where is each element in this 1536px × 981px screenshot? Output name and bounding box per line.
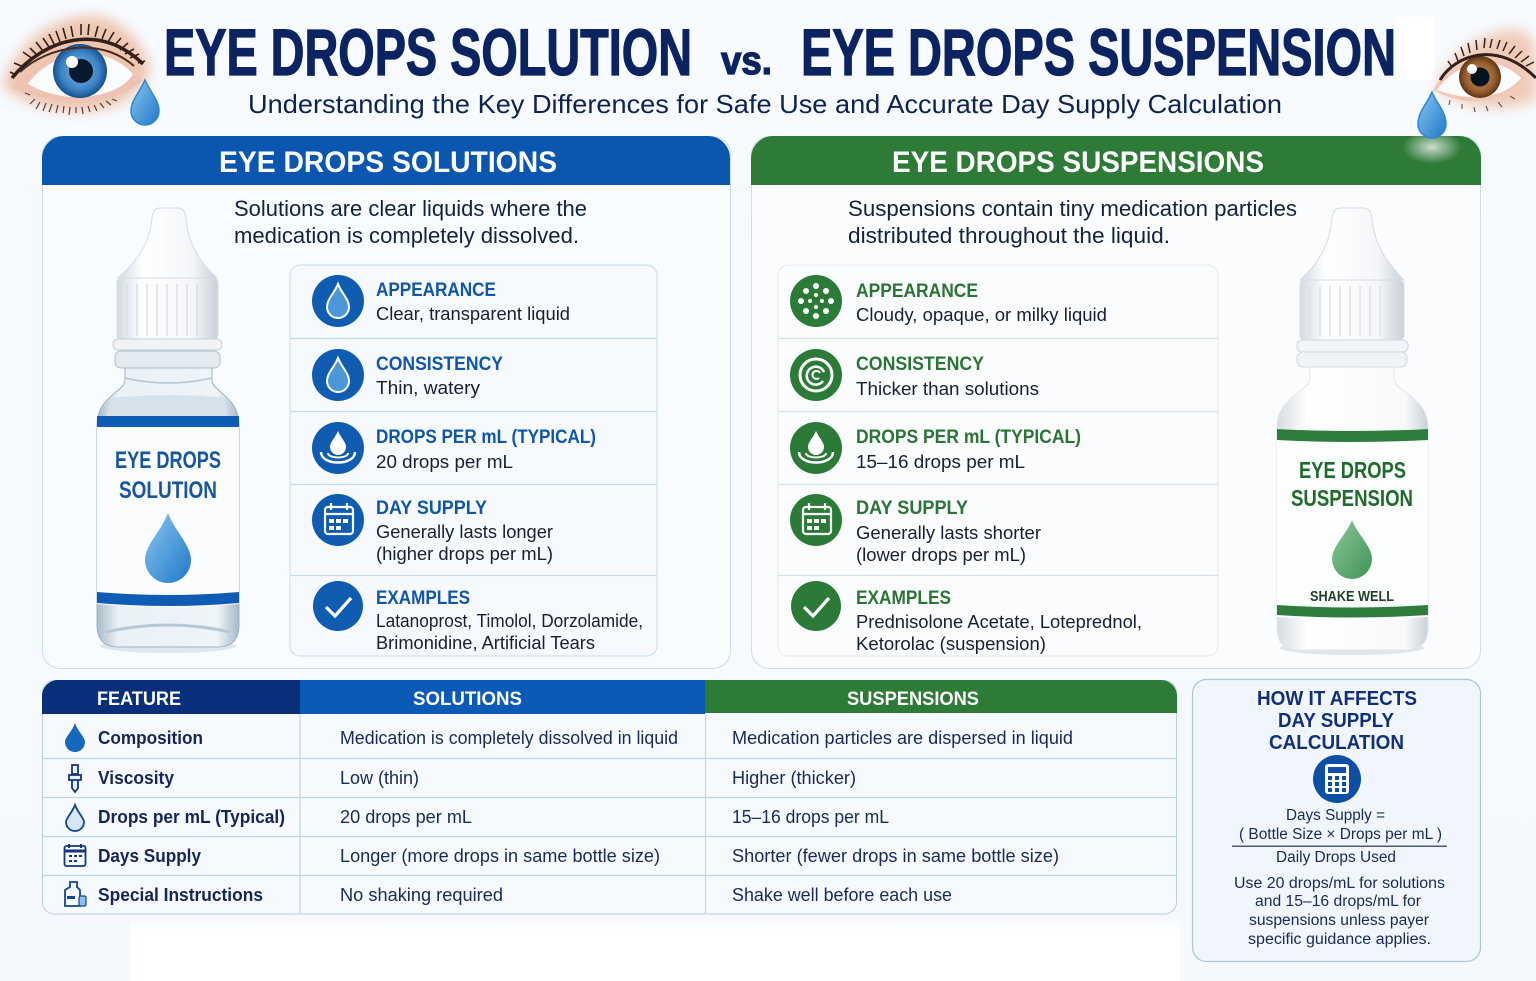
row: appearance: APPEARANCE (376, 279, 496, 301)
row: examples (313, 581, 643, 653)
row: appearance: APPEARANCE (856, 280, 978, 302)
illustration: suspension bottle: SHAKE WELL (1310, 588, 1394, 605)
illustration: solution bottle: EYE DROPS (115, 447, 221, 474)
table header: SOLUTIONS (413, 688, 522, 710)
title (164, 15, 1396, 89)
row: drops per mL: 15–16 drops per mL (856, 451, 1025, 472)
note: and 15–16 drops/mL for (1255, 893, 1421, 910)
row: drops per mL (312, 422, 596, 474)
formula: Daily Drops Used (1276, 849, 1396, 866)
row: drops per mL: DROPS PER mL (TYPICAL) (376, 426, 596, 448)
icon: right brown eye with drop (1418, 30, 1536, 138)
row: drops per mL: DROPS PER mL (TYPICAL) (856, 426, 1081, 448)
heading: how it affects day supply calculation: HOW IT AFFECTS (1257, 688, 1417, 710)
row: drops per mL: 15–16 drops per mL (732, 806, 889, 827)
row: consistency: CONSISTENCY (376, 353, 503, 375)
table header: SUSPENSIONS (847, 688, 979, 710)
row: viscosity: Low (thin) (340, 767, 419, 788)
illustration: suspension bottle (1277, 208, 1428, 655)
row: viscosity: Viscosity (98, 767, 175, 788)
row: viscosity: Higher (thicker) (732, 767, 856, 788)
formula: ( Bottle Size × Drops per mL ) (1239, 826, 1442, 843)
panel header: suspensions: EYE DROPS SUSPENSIONS (892, 146, 1264, 179)
intro text: suspensions (848, 196, 1297, 248)
row: drops per mL: Drops per mL (Typical) (98, 806, 285, 827)
panel header: solutions (42, 136, 730, 185)
row: day supply: DAY SUPPLY (856, 497, 968, 519)
row: appearance: Clear, transparent liquid (376, 303, 570, 324)
row: day supply (790, 494, 1041, 565)
row: appearance (312, 275, 570, 327)
row: days supply: Days Supply (98, 845, 202, 866)
row: drops per mL (66, 805, 889, 831)
row: special instructions: Special Instructions (98, 884, 263, 905)
row: days supply (64, 844, 1059, 866)
illustration: suspension bottle: EYE DROPS (1299, 457, 1406, 483)
intro text: solutions: medication is completely dissolved. (234, 223, 579, 248)
heading: how it affects day supply calculation: DAY SUPPLY (1278, 710, 1395, 732)
row: composition: Medication particles are dispersed in liquid (732, 727, 1073, 748)
row: day supply: DAY SUPPLY (376, 497, 487, 519)
row: composition: Composition (98, 727, 203, 748)
row: composition (65, 723, 1073, 752)
row: examples (791, 581, 1142, 654)
row: consistency (790, 349, 1039, 401)
row: appearance: Cloudy, opaque, or milky liquid (856, 304, 1107, 325)
row: examples: Latanoprost, Timolol, Dorzolamide, (376, 610, 643, 631)
row: consistency: Thin, watery (376, 377, 481, 398)
formula (1232, 807, 1447, 866)
row: day supply: (higher drops per mL) (376, 543, 553, 564)
icon: left blue eye with drop (2, 16, 159, 125)
note: Use 20 drops/mL for solutions (1234, 875, 1445, 892)
illustration: solution bottle: SOLUTION (119, 477, 217, 504)
note (1234, 875, 1445, 948)
row: examples: EXAMPLES (856, 587, 951, 609)
row: examples: Ketorolac (suspension) (856, 633, 1046, 654)
intro text: suspensions: Suspensions contain tiny medication particles (848, 196, 1297, 221)
row: consistency: CONSISTENCY (856, 353, 984, 375)
row: composition: Medication is completely dissolved in liquid (340, 727, 678, 748)
panel: day supply calculation (1192, 680, 1480, 962)
row: special instructions: No shaking required (340, 884, 503, 905)
subtitle: Understanding the Key Differences for Safe Use and Accurate Day Supply Calculation (248, 89, 1282, 119)
row: special instructions (65, 882, 952, 906)
row: drops per mL: 20 drops per mL (376, 451, 513, 472)
row: special instructions: Shake well before each use (732, 884, 952, 905)
intro text: solutions: Solutions are clear liquids where the (234, 196, 587, 221)
intro text: suspensions: distributed throughout the liquid. (848, 223, 1170, 248)
row: examples: Prednisolone Acetate, Loteprednol, (856, 611, 1142, 632)
title: vs. (721, 39, 772, 83)
row: consistency: Thicker than solutions (856, 378, 1039, 399)
comparison table (42, 680, 1177, 914)
row: examples: EXAMPLES (376, 587, 470, 609)
illustration: suspension bottle: SUSPENSION (1291, 485, 1413, 511)
heading: how it affects day supply calculation (1257, 688, 1417, 754)
row: examples: Brimonidine, Artificial Tears (376, 632, 595, 653)
panel: solutions attribute list (290, 265, 657, 656)
row: day supply: Generally lasts longer (376, 521, 553, 542)
row: days supply: Shorter (fewer drops in same bottle size) (732, 845, 1059, 866)
row: appearance (790, 275, 1107, 327)
panel: suspensions attribute list (778, 265, 1218, 656)
note: specific guidance applies. (1248, 931, 1431, 948)
table header (42, 680, 1177, 714)
row: consistency (312, 349, 503, 401)
row: drops per mL: 20 drops per mL (340, 806, 472, 827)
note: suspensions unless payer (1249, 912, 1429, 929)
row: viscosity (69, 765, 856, 792)
row: day supply: Generally lasts shorter (856, 522, 1041, 543)
row: drops per mL (790, 422, 1081, 474)
formula: Days Supply = (1286, 807, 1385, 824)
illustration: solution bottle (97, 208, 239, 653)
table header: FEATURE (97, 688, 181, 710)
panel header: solutions: EYE DROPS SOLUTIONS (219, 146, 557, 179)
icon: calculator (1313, 755, 1361, 803)
intro text: solutions (234, 196, 587, 248)
heading: how it affects day supply calculation: CALCULATION (1269, 732, 1404, 754)
panel header: suspensions (751, 130, 1481, 185)
panel: solutions (42, 136, 730, 668)
row: day supply: (lower drops per mL) (856, 544, 1026, 565)
row: day supply (312, 494, 553, 564)
row: days supply: Longer (more drops in same bottle size) (340, 845, 660, 866)
title: EYE DROPS SOLUTION (164, 15, 692, 89)
panel: suspensions (751, 130, 1481, 668)
